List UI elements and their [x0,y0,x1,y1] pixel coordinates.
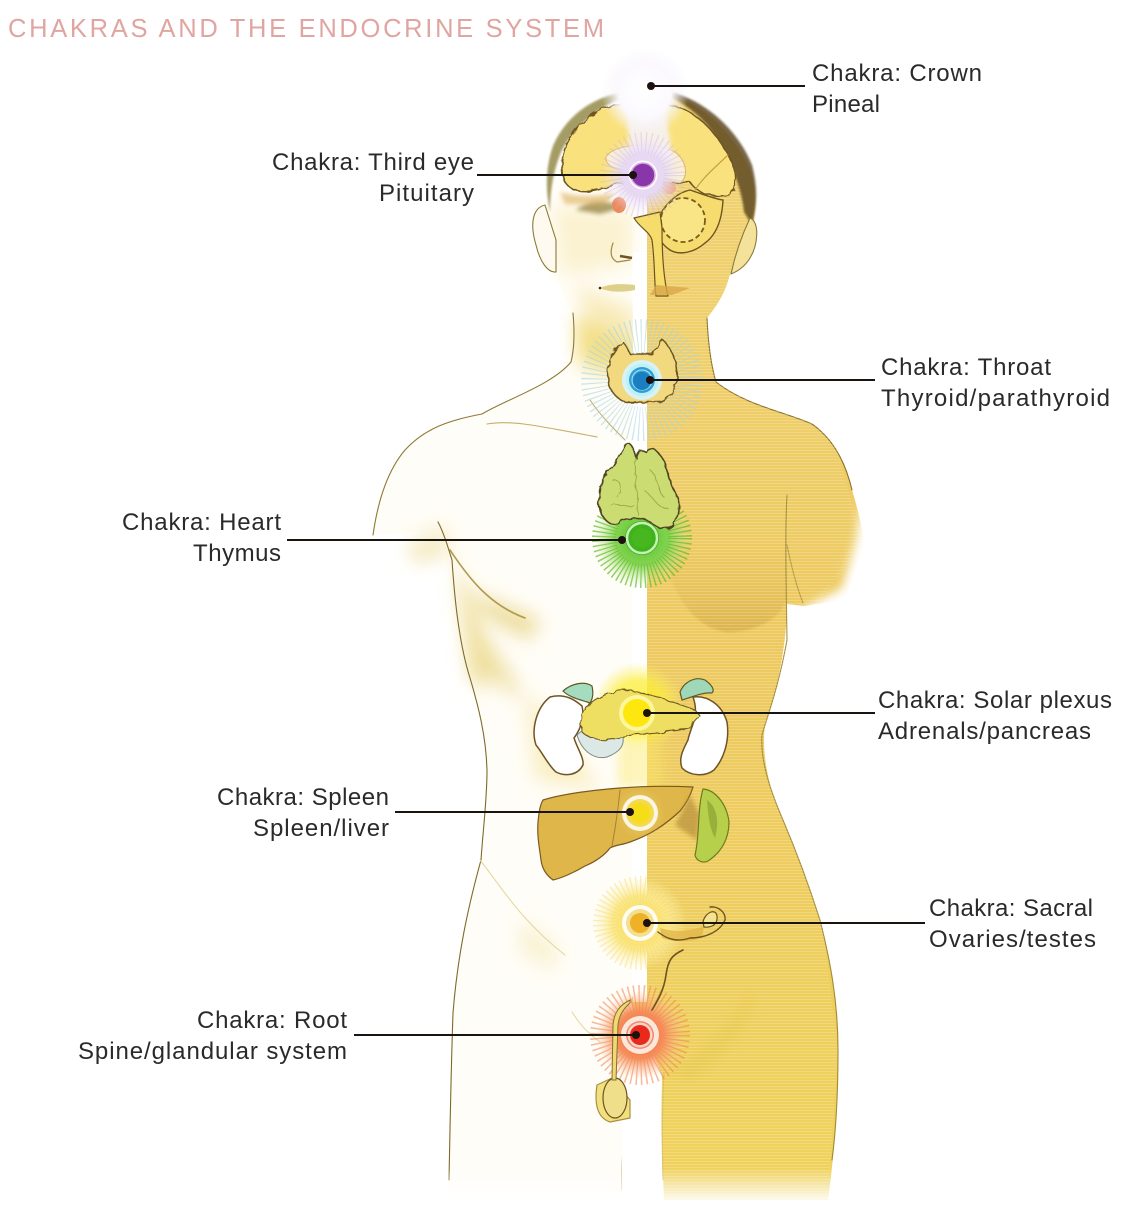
organ: thymus [599,443,679,529]
label: spleen: Spleen/liver [253,815,389,842]
thigh crease shading [664,985,753,1082]
face features [560,192,635,292]
chakra rays behind organs [592,336,690,1079]
breast shading [668,545,787,632]
label: heart: Thymus [193,540,281,567]
label: heart [122,509,626,567]
chakra: throat [622,360,662,400]
label: solar plexus [643,687,1112,745]
horizontal scanlines [647,92,864,1200]
label: root: Chakra: Root [197,1007,347,1034]
label: solar plexus: Chakra: Solar plexus [878,687,1112,714]
label: throat: Thyroid/parathyroid [881,385,1110,412]
chakra: solar plexus [619,695,655,731]
head detail [533,92,757,296]
body: pale male left half [373,92,640,1200]
organ: testis and duct [596,1000,630,1122]
label: root [78,1007,640,1065]
chakra: crown [601,48,689,175]
figure: human body illustration [373,92,895,1204]
label: third eye [272,149,637,207]
label: spleen [217,784,634,842]
chakra: third eye [603,135,683,215]
ears [533,205,757,274]
label: crown [647,60,982,118]
organ: pancreas [577,690,700,758]
label: crown: Chakra: Crown [812,60,982,87]
label: throat: Chakra: Throat [881,354,1051,381]
left body outline strokes [373,313,625,1190]
left body shading [405,205,640,970]
organ: kidneys and adrenals [534,679,728,775]
label: third eye: Chakra: Third eye [272,149,474,176]
bottom fade [430,1168,850,1204]
label: sacral [643,895,1096,953]
hair [547,92,756,225]
organ: liver [538,786,693,880]
label: sacral: Ovaries/testes [929,926,1096,953]
chakra: root [621,1016,659,1054]
organ: thyroid [608,340,677,402]
orange glands [612,182,676,213]
third-eye inner loop [606,145,685,183]
label: crown: Pineal [812,91,880,118]
chakra: spleen [615,788,665,838]
organ: spleen [675,789,729,862]
body: golden female right half [622,92,895,1200]
label: root: Spine/glandular system [78,1038,347,1065]
label: solar plexus: Adrenals/pancreas [878,718,1091,745]
right body outline strokes [662,318,852,1180]
label: spleen: Chakra: Spleen [217,784,389,811]
crotch gap [622,1060,662,1200]
center white strip [633,252,647,1002]
arm fade [800,500,895,630]
label: third eye: Pituitary [379,180,474,207]
brain: cerebrum [562,102,736,197]
chakra: heart [625,521,659,555]
label: throat [646,354,1110,412]
chakra: sacral [622,905,658,941]
label: heart: Chakra: Heart [122,509,281,536]
organ: ovary and uterus [652,907,725,1010]
label: sacral: Chakra: Sacral [929,895,1093,922]
title: CHAKRAS AND THE ENDOCRINE SYSTEM [8,15,604,43]
brain: cerebellum and stem [634,155,728,296]
